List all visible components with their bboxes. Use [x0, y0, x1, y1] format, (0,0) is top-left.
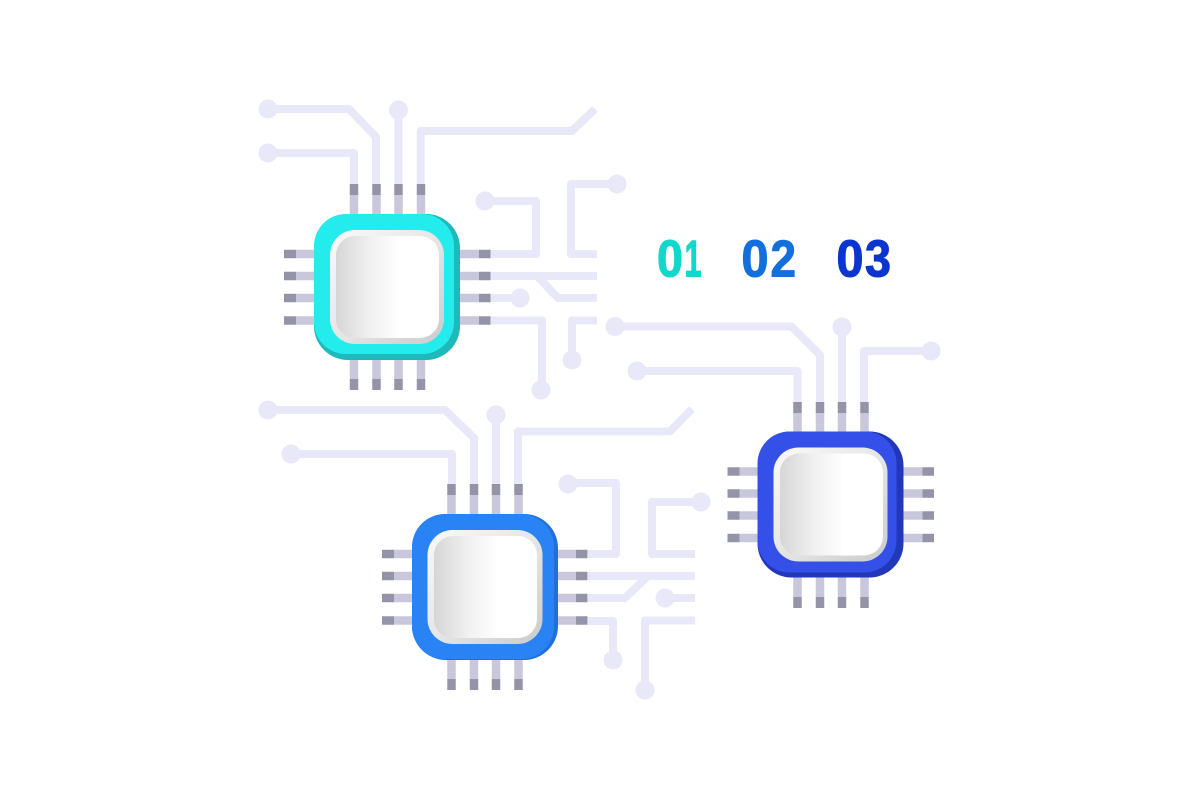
label 01	[657, 230, 702, 288]
circuit traces: chip 03	[606, 317, 940, 402]
chip 02: blue	[382, 484, 588, 690]
label 03: 0	[836, 230, 864, 288]
label 02	[742, 230, 796, 288]
circuit traces: chip 02	[258, 400, 710, 700]
number labels	[657, 230, 891, 288]
label 01: 1	[684, 230, 702, 288]
label 02: 0	[742, 230, 768, 288]
circuit traces: chip 01	[258, 100, 626, 400]
chip 01: cyan	[284, 184, 490, 390]
label 03: 3	[865, 230, 891, 288]
label 01: 0	[657, 230, 683, 288]
label 03	[836, 230, 891, 288]
chip 03: indigo	[728, 402, 934, 608]
label 02: 2	[770, 230, 796, 288]
